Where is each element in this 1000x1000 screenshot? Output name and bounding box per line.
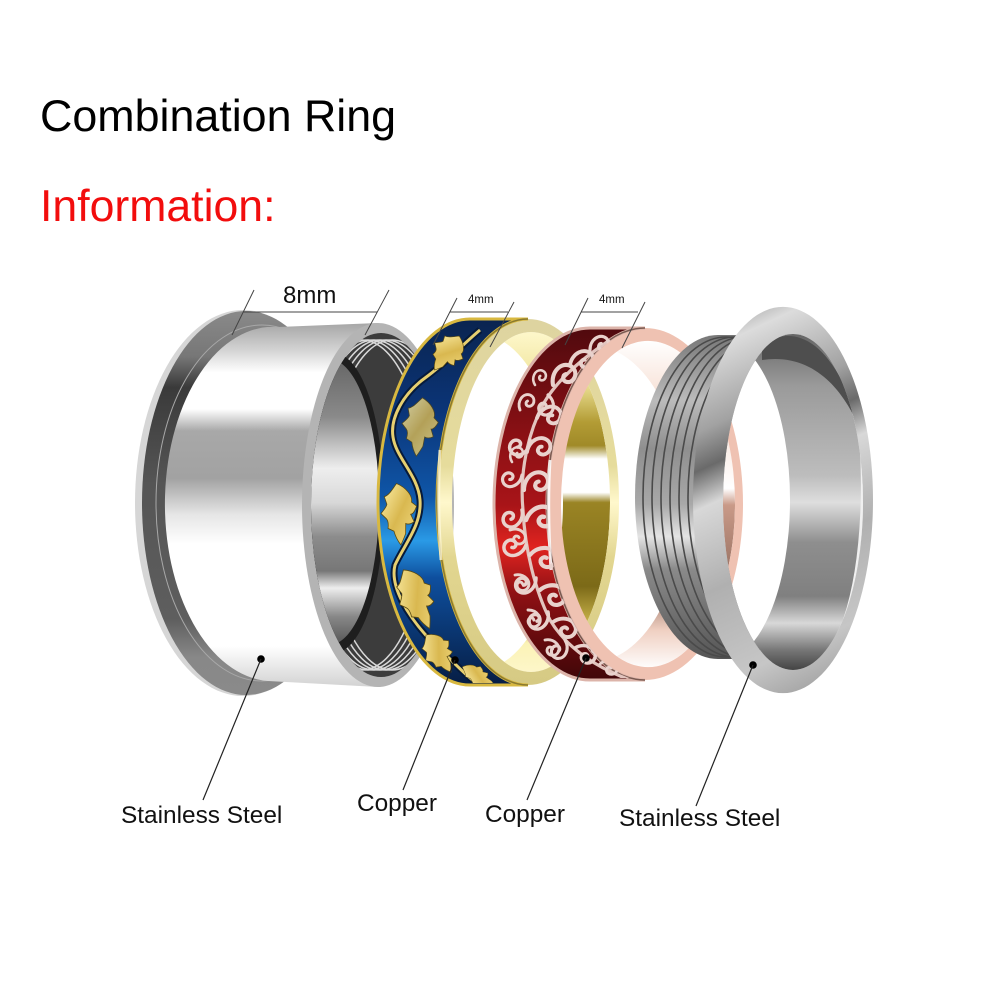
rose rim [547,328,743,680]
rose inner surface [617,351,735,664]
ring 3: rose gold and red filigree band [494,328,743,680]
dimension: 8mm [232,282,389,335]
inner grooves and inner surface [311,333,416,677]
filigree scrolls [500,333,630,680]
red enamel band [494,328,645,680]
callout: red band copper [485,654,590,828]
callout: red band copper: Copper [485,801,565,828]
dimension: first 4mm [433,294,514,347]
grooved barrel [635,335,760,659]
callout: domed ring stainless steel: Stainless Steel [619,805,780,832]
ring 2: gold and blue leaf band [378,319,620,695]
dimension: 8mm: 8mm [283,282,336,309]
dimension: second 4mm [565,294,645,348]
outer body of steel band [165,323,378,687]
callout: blue band copper [357,656,459,817]
title: Combination Ring [40,91,396,141]
dimension: second 4mm: 4mm [599,294,625,306]
dimension: first 4mm: 4mm [468,294,494,306]
ring 1: wide stainless steel band [135,310,460,696]
domed rim [693,307,873,693]
callout: wide band stainless steel [121,655,282,829]
gold inside surface and opening [504,332,610,672]
vine and leaves [380,328,494,683]
callout: wide band stainless steel: Stainless Steel [121,802,282,829]
callout: domed ring stainless steel [619,661,780,832]
ring 4: domed stainless steel ring with grooved barrel [635,307,880,693]
callout: blue band copper: Copper [357,790,437,817]
right rim [302,323,454,687]
blue enamel band [378,319,528,685]
subheading: Information: Information: [40,182,275,231]
gold rim [437,319,619,685]
flange of steel band [135,310,288,696]
interior surface [754,334,863,670]
